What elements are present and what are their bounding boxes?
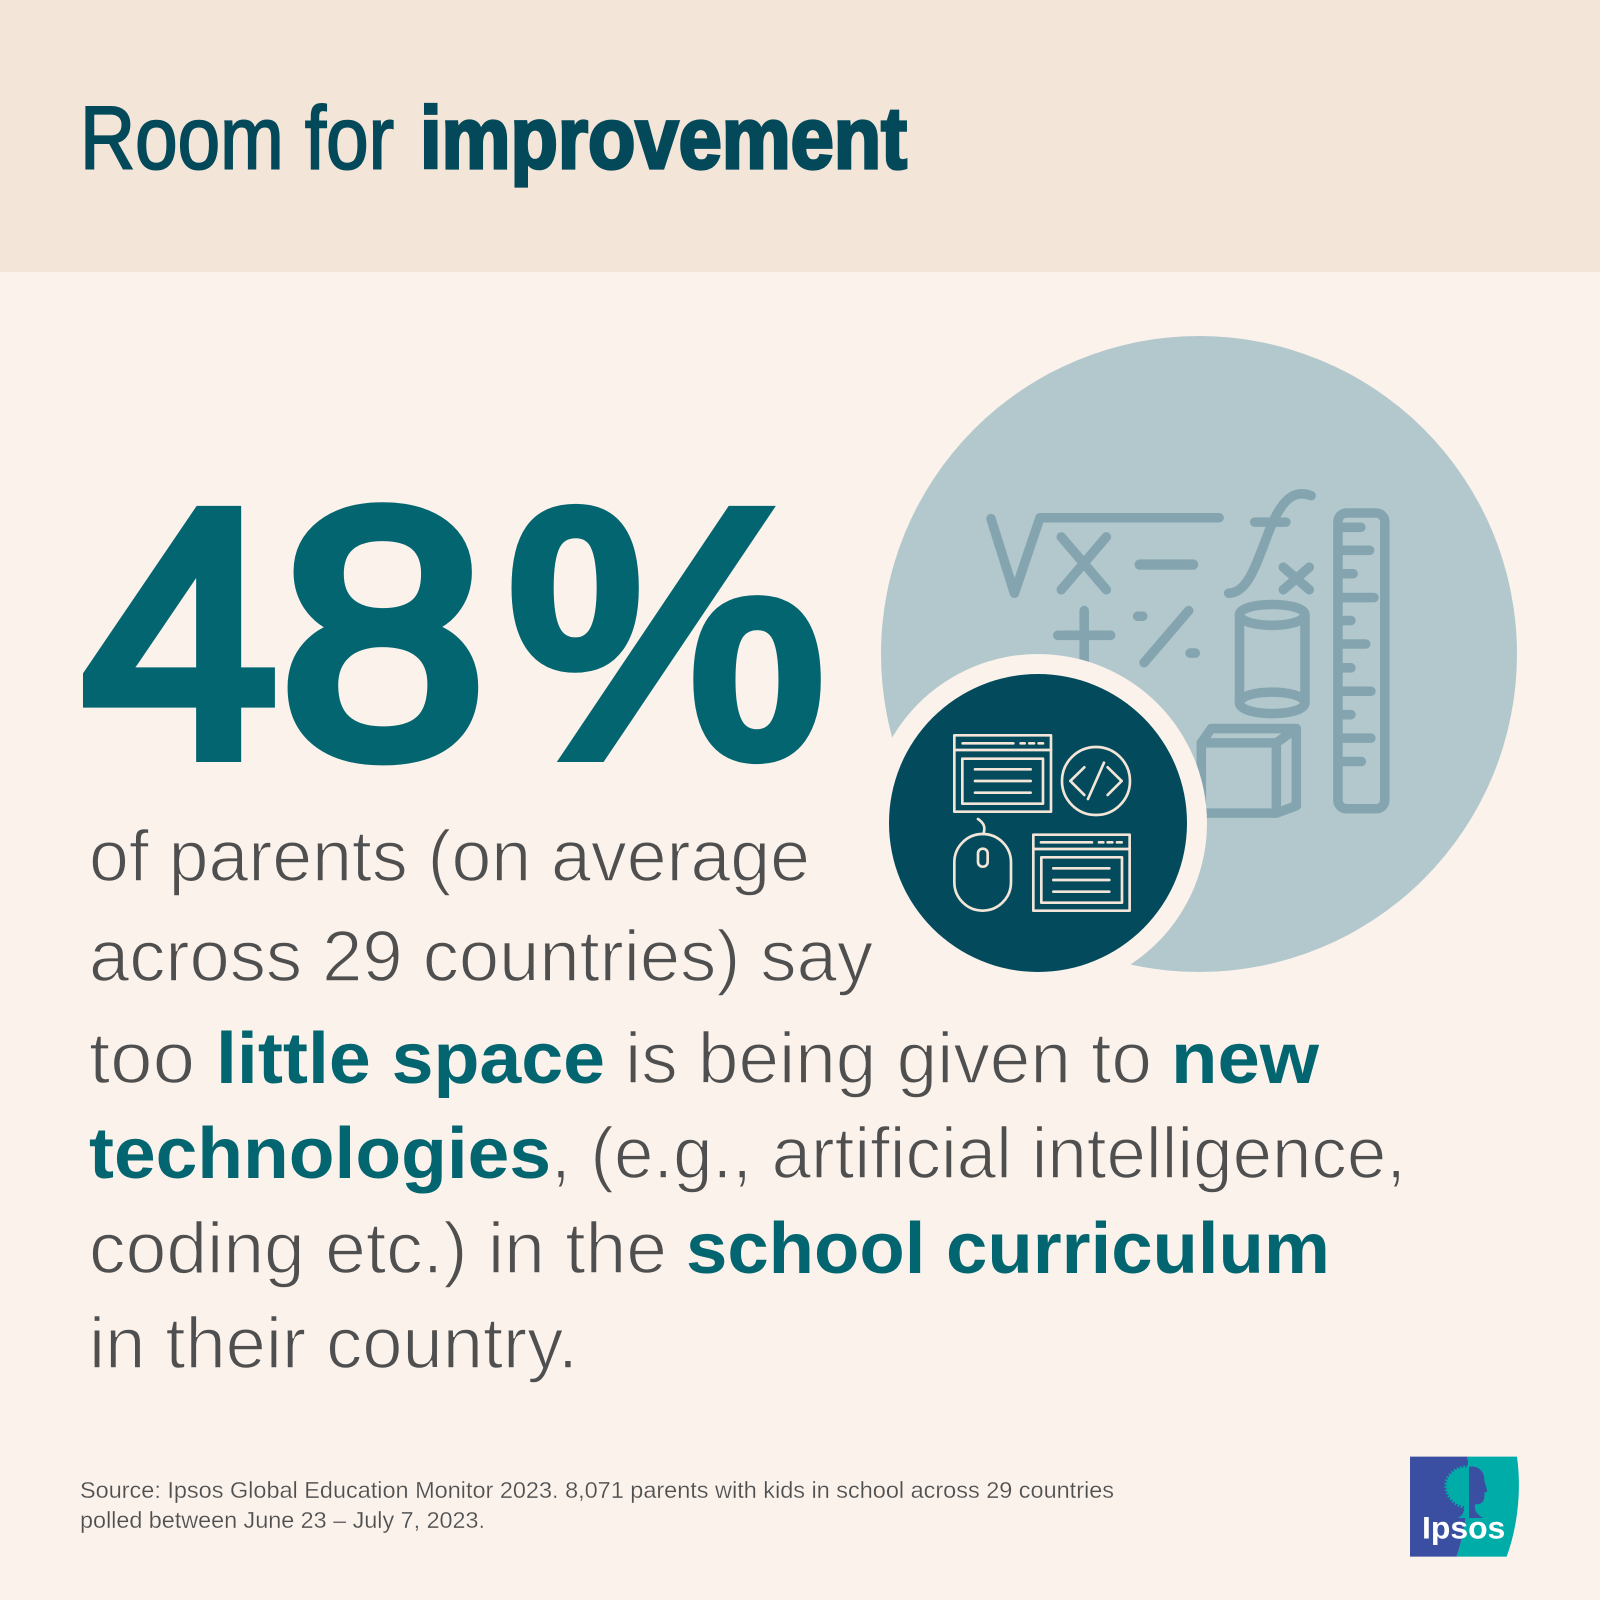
body text <box>89 817 1406 1384</box>
body text: in their country. <box>89 1304 578 1384</box>
big statistic: 48%: % <box>507 438 825 828</box>
body text: too <box>89 1019 195 1099</box>
body text: , (e.g., artificial intelligence, <box>551 1114 1406 1194</box>
big statistic: 48% <box>83 438 825 829</box>
title: Room for <box>80 88 394 188</box>
light circle with maths icons <box>881 336 1517 972</box>
big statistic: 48%: 4 <box>83 438 277 828</box>
dark circle with coding icons <box>889 674 1187 972</box>
source note: polled between June 23 – July 7, 2023. <box>80 1507 485 1533</box>
illustration: maths and coding circles <box>869 336 1517 992</box>
body text: across 29 countries) say <box>89 917 873 997</box>
logo: Ipsos: Ipsos <box>1422 1509 1505 1545</box>
body text: technologies <box>89 1114 551 1194</box>
big statistic: 48%: 8 <box>280 439 486 829</box>
source note <box>80 1477 1114 1533</box>
body text: is being given to <box>625 1019 1152 1099</box>
icon: coding windows, code tag and mouse <box>954 735 1130 911</box>
body text: of parents (on average <box>89 817 810 897</box>
source note: Source: Ipsos Global Education Monitor 2023. 8,071 parents with kids in school across 29 countries <box>80 1477 1114 1503</box>
body text: little space <box>216 1019 605 1099</box>
body text: coding etc.) in the <box>89 1209 667 1289</box>
logo: Ipsos <box>1410 1457 1519 1557</box>
icon: maths symbols, cylinder, cube and ruler <box>991 494 1385 813</box>
title <box>80 88 907 188</box>
body text: new <box>1171 1019 1320 1099</box>
title: improvement <box>420 90 907 187</box>
header band <box>0 0 1600 272</box>
body text: school curriculum <box>686 1209 1330 1289</box>
cream ring <box>869 654 1207 992</box>
